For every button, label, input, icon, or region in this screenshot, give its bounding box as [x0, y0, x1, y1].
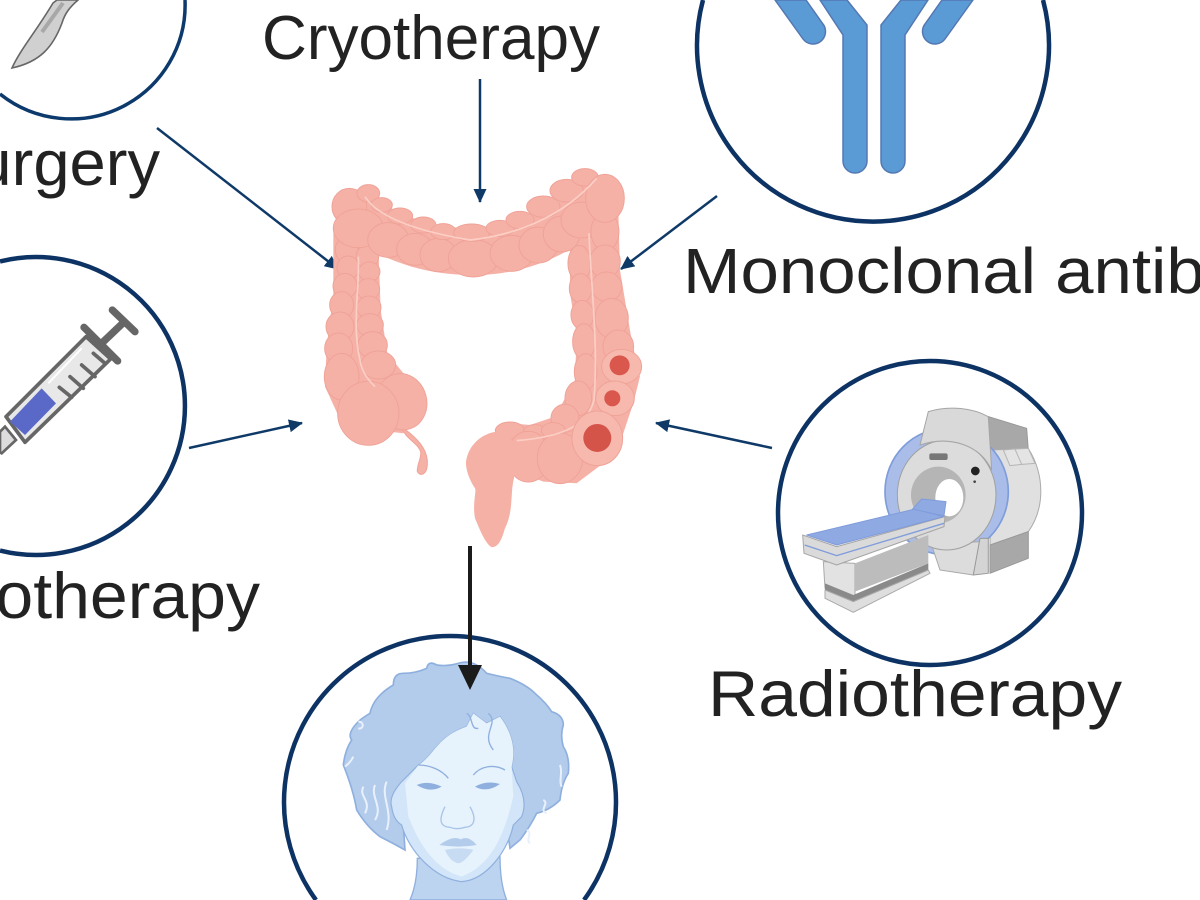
tumour: middle — [596, 381, 634, 416]
hair — [343, 662, 569, 850]
arrow: monoclonal antibody to colon — [621, 196, 717, 269]
arrow: radiotherapy to colon — [656, 423, 772, 448]
colon: solid backing silhouette — [325, 203, 640, 483]
colon: transverse colon — [332, 169, 602, 277]
arrow: chemotherapy to colon — [189, 423, 302, 448]
neck — [410, 857, 507, 900]
icon: monoclonal antibody in circle — [697, 0, 1049, 222]
face — [391, 713, 524, 882]
arrow: colon to patient — [458, 546, 482, 690]
icon: patient face in circle — [284, 636, 616, 900]
illustration: colon with tumours — [324, 169, 642, 547]
arrow: cryotherapy to colon — [479, 79, 481, 202]
tumour: upper — [602, 349, 642, 384]
colon: descending colon — [551, 174, 634, 432]
table — [803, 499, 946, 612]
label: Radiotherapy: Radiotherapy — [708, 657, 1123, 730]
colon: taenia lines — [356, 178, 597, 441]
label: Cryotherapy: Cryotherapy — [262, 4, 600, 73]
arrow: surgery to colon — [157, 128, 338, 269]
tumour: lower — [572, 411, 623, 466]
colon: sigmoid colon and rectum — [466, 422, 583, 547]
icon: radiotherapy machine in circle — [778, 361, 1082, 665]
icon: surgery scalpel in circle — [0, 0, 185, 119]
colon: ascending colon and cecum — [324, 237, 433, 474]
icon: chemotherapy syringe in circle — [0, 257, 185, 555]
